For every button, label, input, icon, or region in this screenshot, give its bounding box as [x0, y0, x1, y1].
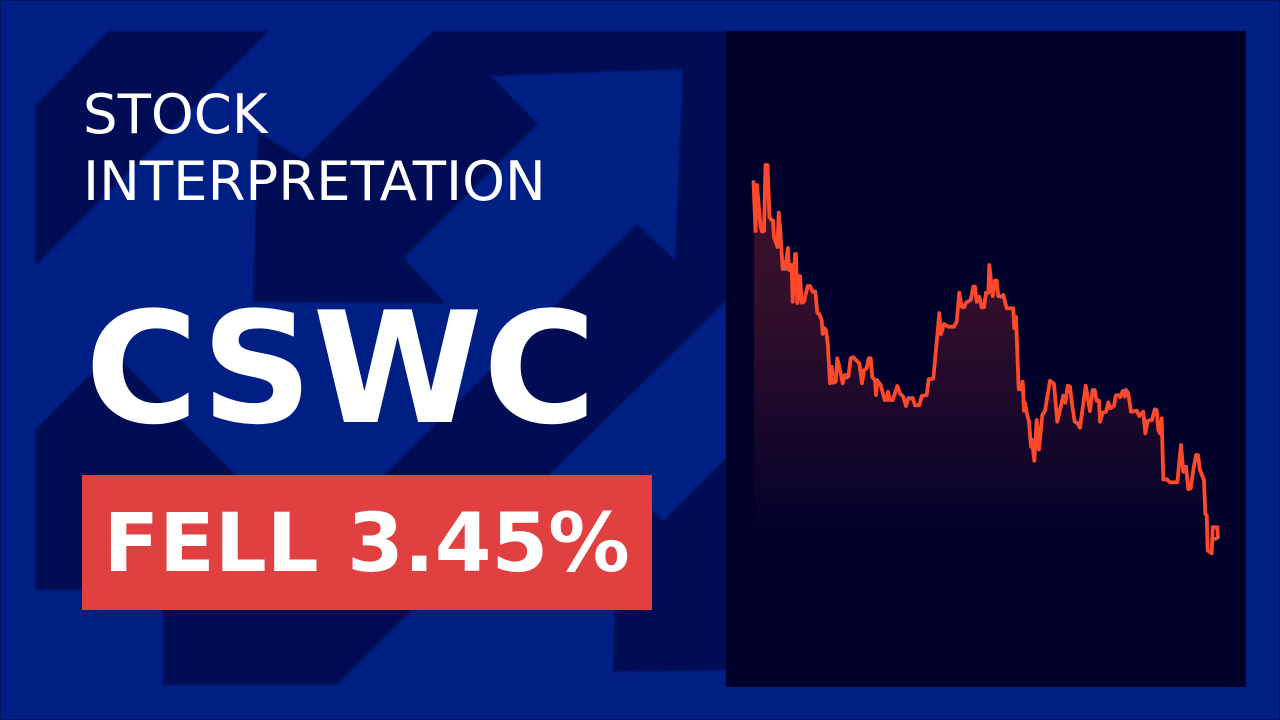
background arrows pattern [35, 31, 730, 685]
chart blue markers [752, 180, 1219, 538]
badge: fell 3.45%: FELL 3.45% [104, 496, 630, 591]
panel: price chart [726, 31, 1246, 687]
chart price line [754, 165, 1218, 553]
title: stock interpretation: INTERPRETATION [83, 149, 546, 213]
chart area fill [754, 165, 1218, 545]
ticker: CSWC: CSWC [85, 280, 596, 459]
title: stock interpretation [83, 82, 546, 213]
badge: fell 3.45% [82, 475, 652, 610]
title: stock interpretation: STOCK [83, 82, 269, 146]
